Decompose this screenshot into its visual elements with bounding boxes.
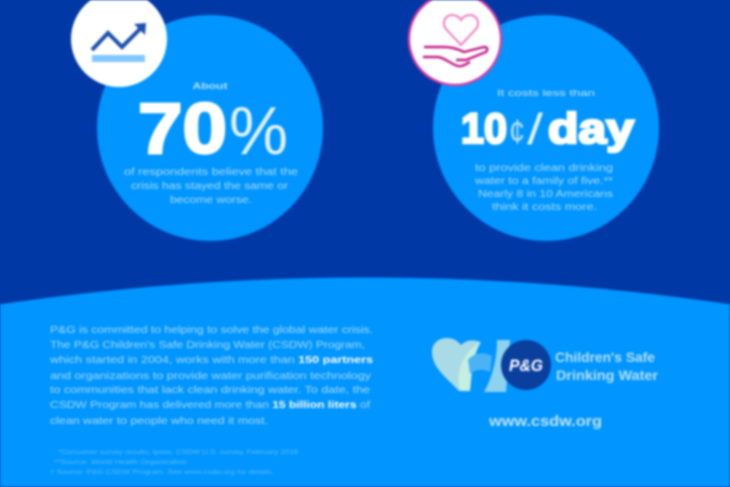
text block: commitment paragraph: clean water to people who need it most.: [50, 415, 268, 427]
label: about: About: [192, 81, 229, 92]
big number: 70%: 70: [138, 90, 227, 169]
website url: www.csdw.org: [488, 413, 602, 430]
description: 10 cents: Nearly 8 in 10 Americans: [478, 189, 613, 200]
footnotes: † Source: P&G CSDW Program. See www.csdw.org for details.: [50, 470, 274, 476]
footnotes: *Consumer survey results, Ipsos; CSDW U.S. survey, February 2018: [58, 450, 299, 456]
big number: 10 cents per day: ¢: [509, 113, 525, 151]
icon: hand holding heart: [409, 0, 501, 85]
text block: commitment paragraph: which started in 2004, works with more than 150 partners: [49, 354, 373, 366]
description: 70%: of respondents believe that the: [124, 167, 299, 178]
logo mark: heart and P&G circle: P&G: [509, 356, 543, 375]
logo wordmark: Drinking Water: [556, 368, 659, 383]
text block: commitment paragraph: and organizations to provide water purification technology: [50, 370, 372, 382]
logo mark: heart and P&G circle: [432, 338, 551, 392]
description: 70%: [124, 167, 299, 206]
description: 10 cents: to provide clean drinking: [475, 163, 613, 174]
icon: rising line chart: [71, 0, 167, 87]
logo: Children's Safe Drinking Water: [432, 338, 659, 392]
text block: commitment paragraph: to communities that lack clean drinking water. To date, the: [50, 384, 370, 396]
footnotes: [50, 450, 299, 476]
text block: commitment paragraph: The P&G Children's Safe Drinking Water (CSDW) Program,: [50, 339, 365, 351]
text block: commitment paragraph: [49, 324, 373, 427]
big number: 10 cents per day: [461, 105, 634, 154]
logo wordmark: Children's Safe: [555, 350, 655, 365]
big number: 10 cents per day: day: [548, 105, 634, 153]
description: 70%: become worse.: [170, 195, 252, 206]
description: 10 cents: [474, 163, 613, 213]
description: 70%: crisis has stayed the same or: [131, 181, 289, 192]
footnotes: **Source: World Health Organization: [54, 460, 187, 466]
panel: bottom commitment section: [0, 278, 730, 487]
description: 10 cents: water to a family of five.**: [474, 176, 613, 187]
big number: 70%: [138, 90, 288, 169]
big number: 70%: %: [229, 93, 288, 169]
big number: 10 cents per day: /: [527, 105, 544, 154]
description: 10 cents: think it costs more.: [492, 202, 597, 213]
logo wordmark: [555, 350, 659, 383]
panel: 70% statistic: [97, 15, 323, 241]
label: it costs less than: It costs less than: [497, 88, 595, 99]
panel: 10 cents a day statistic: [433, 15, 659, 241]
text block: commitment paragraph: CSDW Program has delivered more than 15 billion liters of: [50, 399, 370, 411]
text block: commitment paragraph: P&G is committed to helping to solve the global water crisis.: [50, 324, 373, 336]
big number: 10 cents per day: 10: [461, 105, 507, 153]
